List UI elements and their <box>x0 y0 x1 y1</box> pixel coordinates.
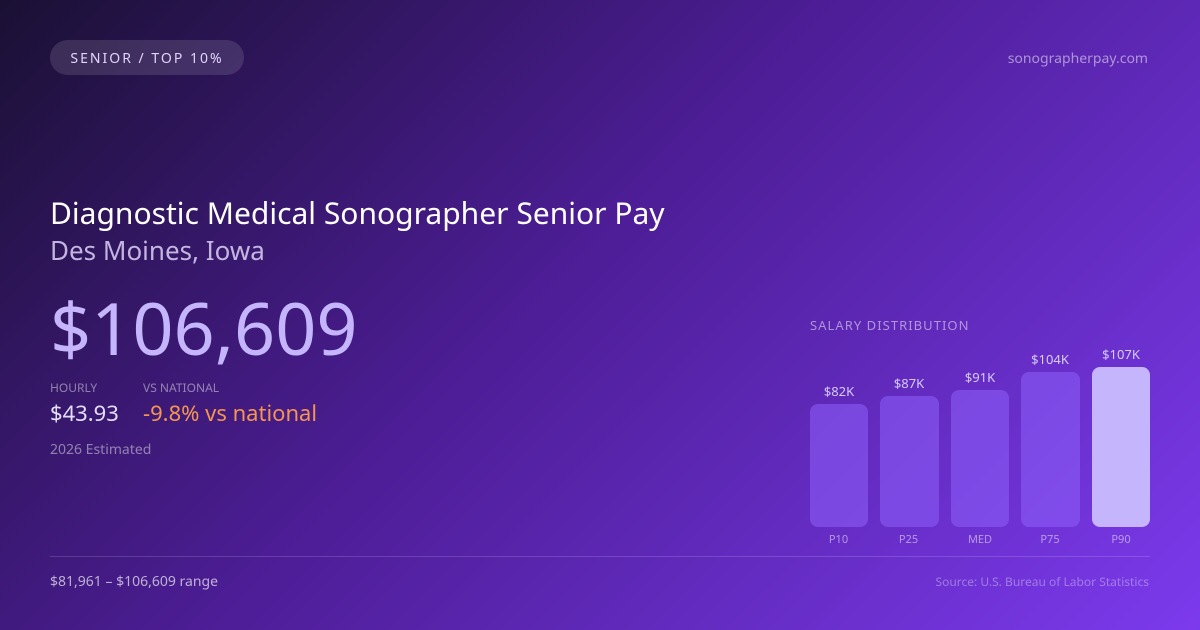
hourly stat <box>50 379 119 428</box>
title: Diagnostic Medical Sonographer Senior Pay <box>50 192 665 233</box>
bar P10 <box>810 404 868 527</box>
chart heading: SALARY DISTRIBUTION <box>810 316 970 334</box>
bar P25 <box>880 396 939 527</box>
source note: Source: U.S. Bureau of Labor Statistics <box>936 573 1149 590</box>
salary range: $81,961 – $106,609 range <box>50 572 218 591</box>
label $87K: $87K <box>894 374 924 392</box>
bar P90 highlighted <box>1092 367 1150 527</box>
label $82K: $82K <box>824 382 854 400</box>
hourly value: $43.93 <box>50 398 119 428</box>
label P75: P75 <box>1040 532 1060 547</box>
badge: senior / top 10% <box>50 40 244 75</box>
label P25: P25 <box>899 532 918 547</box>
vs national label: VS NATIONAL <box>143 379 219 396</box>
vs national stat <box>143 379 317 428</box>
label $91K: $91K <box>965 368 995 386</box>
vs national value: -9.8% vs national <box>143 398 317 428</box>
label $104K: $104K <box>1031 350 1069 368</box>
label $107K: $107K <box>1102 345 1140 363</box>
hourly label: HOURLY <box>50 379 97 396</box>
bar P75 <box>1021 372 1080 527</box>
label MED: MED <box>968 532 992 547</box>
badge: senior / top 10%: SENIOR / TOP 10% <box>70 49 224 68</box>
site domain: sonographerpay.com <box>1008 49 1148 68</box>
bar median <box>951 390 1009 527</box>
location subtitle: Des Moines, Iowa <box>50 232 265 268</box>
year note: 2026 Estimated <box>50 440 151 459</box>
label P10: P10 <box>829 532 848 547</box>
label P90: P90 <box>1111 532 1131 547</box>
main salary figure: $106,609 <box>50 279 358 377</box>
chart: salary distribution <box>810 316 1150 547</box>
